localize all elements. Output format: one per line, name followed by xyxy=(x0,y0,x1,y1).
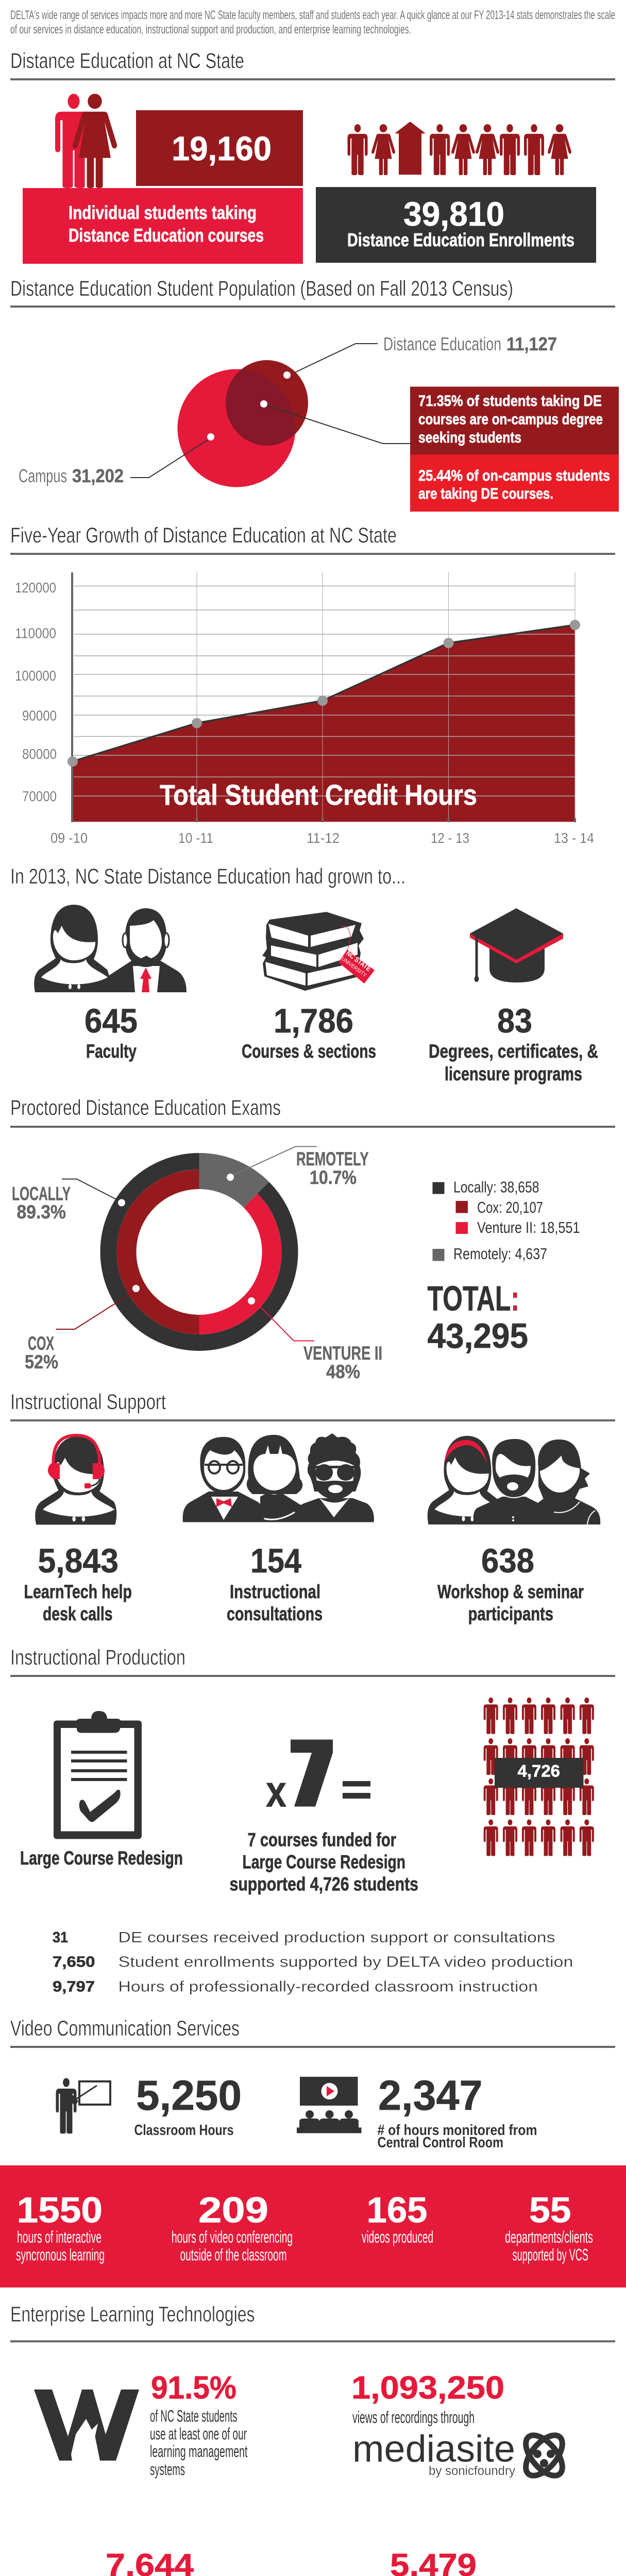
icon: teacher at board xyxy=(56,2078,110,2134)
stat: instructional consultations xyxy=(183,1433,374,1624)
stat: 91.5%: learning management xyxy=(150,2442,248,2461)
x-axis labels: 09 -10 xyxy=(50,830,88,846)
label: campus count: Campus xyxy=(19,465,67,486)
icon: faculty pair xyxy=(34,905,187,992)
x-axis labels: 12 - 13 xyxy=(431,830,469,846)
stat: 1550 xyxy=(16,2190,105,2264)
icon: woman with headset xyxy=(35,1435,116,1524)
x-axis labels xyxy=(50,830,594,846)
heading: proctored exams xyxy=(10,1095,615,1128)
band: VCS stats xyxy=(0,2165,626,2287)
stat: learntech help desk calls: 5,843 xyxy=(38,1541,119,1580)
list: production stats: DE courses received production support or consultations xyxy=(119,1929,555,1946)
y-axis labels: 80000 xyxy=(22,746,57,762)
stat: courses and sections: 1,786 xyxy=(274,1002,353,1040)
label: venture II xyxy=(303,1343,382,1382)
box: 19,160: 19,160 xyxy=(172,129,272,167)
label: locally: LOCALLY xyxy=(12,1183,71,1205)
stat: learntech help desk calls: LearnTech help xyxy=(24,1581,132,1602)
legend: Cox: 20,107 xyxy=(477,1198,543,1216)
label: distance education count: Distance Education xyxy=(383,333,501,354)
stat: instructional consultations: 154 xyxy=(250,1541,301,1580)
stat: 91.5%: 91.5% xyxy=(151,2370,236,2406)
icon: stack of books with tag xyxy=(262,912,375,991)
label: remotely: REMOTELY xyxy=(296,1148,369,1170)
stat: hours monitored: 2,347 xyxy=(378,2072,482,2119)
icon: three people with red headband xyxy=(428,1436,600,1524)
text: 7 courses funded: Large Course Redesign xyxy=(242,1852,405,1872)
label: remotely xyxy=(296,1148,369,1188)
logo: mediasite: by sonicfoundry xyxy=(429,2464,515,2478)
stat: 1550: syncronous learning xyxy=(16,2245,105,2264)
list: production stats: 31 xyxy=(53,1929,68,1946)
y-axis labels: 120000 xyxy=(15,580,56,596)
stat: 1,093,250: 1,093,250 xyxy=(351,2370,504,2406)
intro text: of our services in distance education, instructional support and production, and enterprise learning technologies. xyxy=(10,23,411,37)
stat: faculty xyxy=(34,905,187,1062)
icon: wolf W logo xyxy=(34,2389,139,2461)
heading: Distance Education at NC State: Distance Education at NC State xyxy=(10,48,244,73)
stat: instructional consultations: consultations xyxy=(227,1603,323,1624)
stat: 55 xyxy=(505,2190,593,2264)
callout: 4,726 xyxy=(495,1758,583,1788)
heading: enterprise learning technologies: Enterprise Learning Technologies xyxy=(10,2302,255,2326)
stat: 165: 165 xyxy=(367,2190,428,2230)
stat: 91.5%: use at least one of our xyxy=(150,2425,247,2443)
stat: learntech help desk calls: desk calls xyxy=(43,1603,112,1624)
x-axis labels: 13 - 14 xyxy=(554,830,594,846)
icon: row of people with arrow xyxy=(347,122,571,175)
stat: 165 xyxy=(362,2190,433,2246)
label: venture II: VENTURE II xyxy=(303,1343,382,1364)
text: 7 courses funded: supported 4,726 students xyxy=(230,1873,418,1895)
stat: 55: 55 xyxy=(529,2190,571,2230)
stat: 91.5%: of NC State students xyxy=(150,2407,237,2426)
total: TOTAL: xyxy=(428,1279,519,1318)
x-axis labels: 11-12 xyxy=(307,830,340,846)
stat: hours monitored xyxy=(297,2072,537,2151)
icon: stack of books with tag: NC STATE xyxy=(345,949,373,973)
venn diagram xyxy=(130,344,410,487)
label: cox xyxy=(25,1333,58,1372)
icon: video screen and audience xyxy=(297,2077,362,2133)
equation: times seven equals: x xyxy=(266,1767,286,1817)
stat: hours monitored: Central Control Room xyxy=(377,2134,503,2151)
y-axis labels xyxy=(15,580,57,804)
stat: faculty: 645 xyxy=(84,1002,138,1040)
box: 39,810 xyxy=(316,187,596,263)
stat: 209: 209 xyxy=(198,2190,268,2230)
stat: courses and sections xyxy=(242,912,376,1062)
label: locally xyxy=(12,1183,71,1223)
box: individual students caption xyxy=(23,188,303,264)
text: 7 courses funded: 7 courses funded for xyxy=(247,1829,396,1851)
legend: Remotely: 4,637 xyxy=(453,1245,547,1263)
box: 19,160 xyxy=(136,110,303,186)
label: distance education count: 11,127 xyxy=(506,333,557,354)
large course redesign: Large Course Redesign xyxy=(20,1848,183,1869)
y-axis labels: 70000 xyxy=(22,788,57,804)
list: production stats xyxy=(53,1929,573,1995)
heading: instructional support xyxy=(10,1389,615,1421)
stat: 209 xyxy=(172,2190,293,2264)
total xyxy=(428,1279,528,1355)
label: venture II: 48% xyxy=(326,1361,360,1382)
label: remotely: 10.7% xyxy=(310,1167,357,1188)
heading: video communication services xyxy=(10,2016,615,2048)
pictogram: students supported xyxy=(484,1698,594,1856)
box: individual students caption: Individual students taking xyxy=(69,202,257,223)
chart title: Total Student Credit Hours xyxy=(160,778,477,811)
panel: enrollments xyxy=(316,122,596,263)
box: 39,810: 39,810 xyxy=(403,195,504,233)
stat: 91.5%: systems xyxy=(150,2460,185,2479)
callout: 25.44%: are taking DE courses. xyxy=(418,485,553,502)
y-axis labels: 100000 xyxy=(15,668,56,684)
label: cox: COX xyxy=(28,1333,54,1354)
callout: 25.44% xyxy=(410,454,619,512)
stat: faculty: Faculty xyxy=(86,1041,137,1062)
callout: 71.35%: seeking students xyxy=(418,429,521,446)
heading: video communication services: Video Communication Services xyxy=(10,2016,240,2040)
stat: 1,093,250 xyxy=(351,2370,569,2482)
stat: instructional consultations: Instructional xyxy=(230,1581,320,1602)
heading: five-year growth: Five-Year Growth of Distance Education at NC State xyxy=(10,523,397,547)
icon: stack of books with tag: UNIVERSITY xyxy=(340,956,367,978)
donut chart: proctored exams xyxy=(56,1146,317,1343)
stat: 1,093,250: views of recordings through xyxy=(352,2408,475,2427)
stat: workshop participants: 638 xyxy=(481,1541,534,1580)
list: production stats: Hours of professionally-recorded classroom instruction xyxy=(119,1978,538,1995)
label: cox: 52% xyxy=(25,1351,58,1372)
text: 7 courses funded xyxy=(230,1829,418,1895)
stat: 209: outside of the classroom xyxy=(180,2245,286,2264)
label: locally: 89.3% xyxy=(16,1201,66,1223)
icon: three people xyxy=(183,1433,374,1522)
stat: 1550: 1550 xyxy=(16,2190,103,2230)
logo: mediasite xyxy=(352,2428,569,2482)
icon: man and woman xyxy=(55,94,117,188)
stat: learntech help desk calls xyxy=(24,1435,132,1624)
stat: degrees: licensure programs xyxy=(445,1063,582,1084)
heading: in 2013: In 2013, NC State Distance Education had grown to... xyxy=(10,864,405,888)
heading: instructional production: Instructional Production xyxy=(10,1645,185,1669)
heading: Distance Education at NC State xyxy=(10,48,615,80)
legend xyxy=(433,1178,580,1263)
list: production stats: 7,650 xyxy=(53,1954,95,1970)
stat: workshop participants xyxy=(428,1436,600,1624)
box: 39,810: Distance Education Enrollments xyxy=(347,229,574,250)
stat: degrees: 83 xyxy=(497,1002,532,1040)
heading: five-year growth xyxy=(10,523,615,555)
y-axis labels: 110000 xyxy=(15,625,56,641)
list: production stats: Student enrollments supported by DELTA video production xyxy=(119,1954,573,1970)
heading: proctored exams: Proctored Distance Education Exams xyxy=(10,1095,281,1120)
list: production stats: 9,797 xyxy=(53,1978,95,1995)
stat: workshop participants: participants xyxy=(468,1603,553,1624)
panel: individual students xyxy=(23,94,303,264)
label: campus count: 31,202 xyxy=(72,465,124,486)
callout: 4,726: 4,726 xyxy=(517,1762,560,1781)
stat: 165: videos produced xyxy=(362,2228,433,2246)
total: 43,295 xyxy=(428,1316,528,1355)
heading: instructional support: Instructional Support xyxy=(10,1389,166,1414)
logo: mediasite: mediasite xyxy=(352,2428,515,2470)
equation: times seven equals xyxy=(266,1739,370,1817)
icon: clipboard xyxy=(54,1711,142,1839)
stat: hours monitored: # of hours monitored from xyxy=(377,2122,537,2139)
legend: Venture II: 18,551 xyxy=(477,1218,580,1236)
stat: 209: hours of video conferencing xyxy=(172,2228,293,2246)
stat: workshop participants: Workshop & seminar xyxy=(437,1581,584,1602)
large course redesign xyxy=(20,1711,183,1869)
x-axis labels: 10 -11 xyxy=(178,830,213,846)
heading: instructional production xyxy=(10,1645,615,1677)
heading: enterprise learning technologies xyxy=(10,2302,615,2342)
stat: classroom hours xyxy=(56,2072,242,2139)
stat: classroom hours: 5,250 xyxy=(136,2072,242,2119)
y-axis labels: 90000 xyxy=(22,708,57,723)
callout: 71.35% xyxy=(410,386,619,454)
label: campus count xyxy=(19,465,124,486)
stat: 91.5% xyxy=(34,2370,248,2479)
stat: degrees xyxy=(429,908,598,1084)
stat: 1550: hours of interactive xyxy=(17,2228,101,2246)
stat: courses and sections: Courses & sections xyxy=(242,1041,376,1062)
area chart: total student credit hours xyxy=(15,572,594,846)
intro text xyxy=(10,8,615,37)
stat: classroom hours: Classroom Hours xyxy=(134,2122,234,2139)
box: individual students caption: Distance Education courses xyxy=(69,225,264,246)
legend: Locally: 38,658 xyxy=(453,1178,539,1196)
icon: graduation cap xyxy=(470,908,563,982)
